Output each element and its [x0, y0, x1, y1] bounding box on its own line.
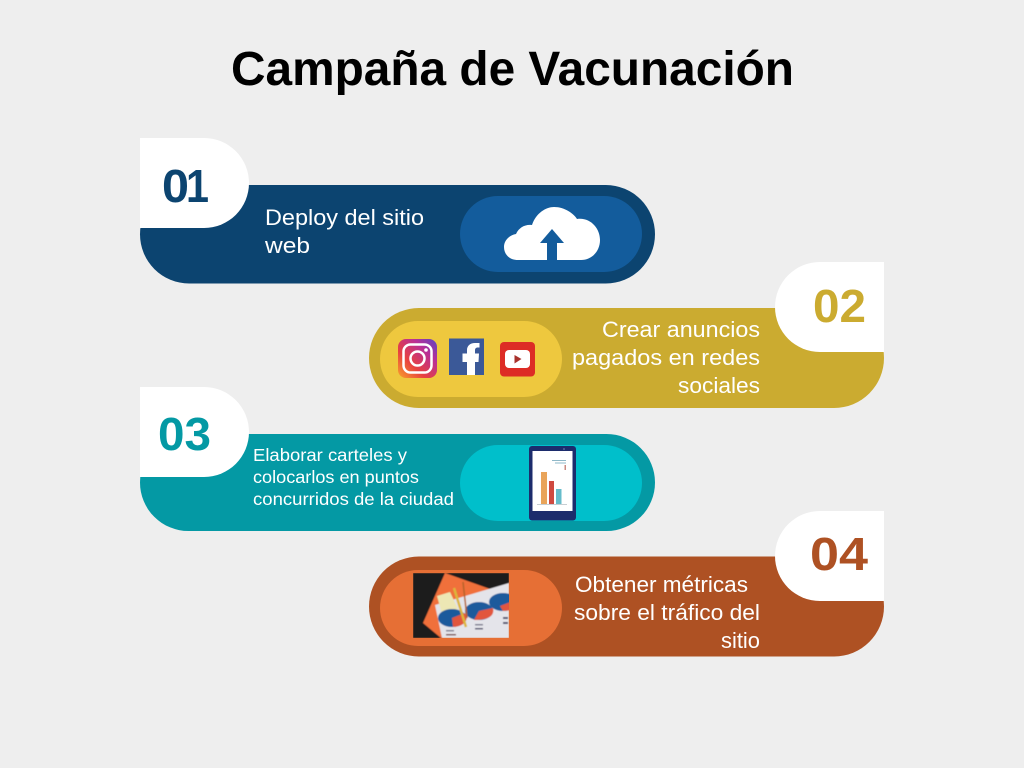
- icon pill 03: [460, 445, 642, 521]
- panel: step 01: [140, 138, 655, 284]
- icon pill 02: [380, 321, 562, 397]
- text 01: Deploy del sitio: [265, 205, 424, 230]
- number tab 02: [775, 262, 884, 352]
- icon: youtube: [500, 342, 535, 376]
- panel: step 03: [140, 387, 655, 531]
- icon: instagram: [398, 339, 437, 378]
- number 04: 04: [810, 528, 868, 580]
- bar 03: [140, 434, 655, 531]
- text 01: [264, 205, 424, 258]
- text 04: Obtener métricas: [575, 572, 748, 597]
- number 01: [162, 160, 209, 212]
- text 02: pagados en redes: [572, 345, 760, 370]
- icon: tablet chart: [529, 446, 576, 520]
- icon: facebook: [449, 338, 484, 375]
- icon pill 04: [380, 570, 562, 646]
- number tab 03: [140, 387, 249, 477]
- number 01: 0: [162, 160, 189, 212]
- text 04: sobre el tráfico del: [574, 600, 760, 625]
- text 02: Crear anuncios: [602, 317, 760, 342]
- bar 04: [369, 556, 884, 656]
- text 02: [572, 317, 760, 398]
- bar 02: [369, 308, 884, 408]
- text 04: sitio: [721, 628, 760, 653]
- text 03: Elaborar carteles y: [253, 445, 407, 465]
- title: Campaña de Vacunación: [231, 43, 794, 96]
- number 03: 03: [158, 408, 211, 460]
- number tab 01: [140, 138, 249, 228]
- text 03: [253, 445, 454, 509]
- panel: step 02: [369, 262, 884, 408]
- icon: photo of charts: [413, 573, 517, 638]
- icon: cloud upload: [504, 207, 600, 260]
- text 01: web: [264, 233, 310, 258]
- text 03: concurridos de la ciudad: [253, 489, 454, 509]
- icon pill 01: [460, 196, 642, 272]
- text 03: colocarlos en puntos: [253, 467, 419, 487]
- number tab 04: [775, 511, 884, 601]
- text 04: [574, 572, 760, 653]
- number 02: 02: [813, 280, 866, 332]
- text 02: sociales: [678, 373, 760, 398]
- panel: step 04: [369, 511, 884, 656]
- number 01: 1: [186, 160, 209, 212]
- bar 01: [140, 185, 655, 284]
